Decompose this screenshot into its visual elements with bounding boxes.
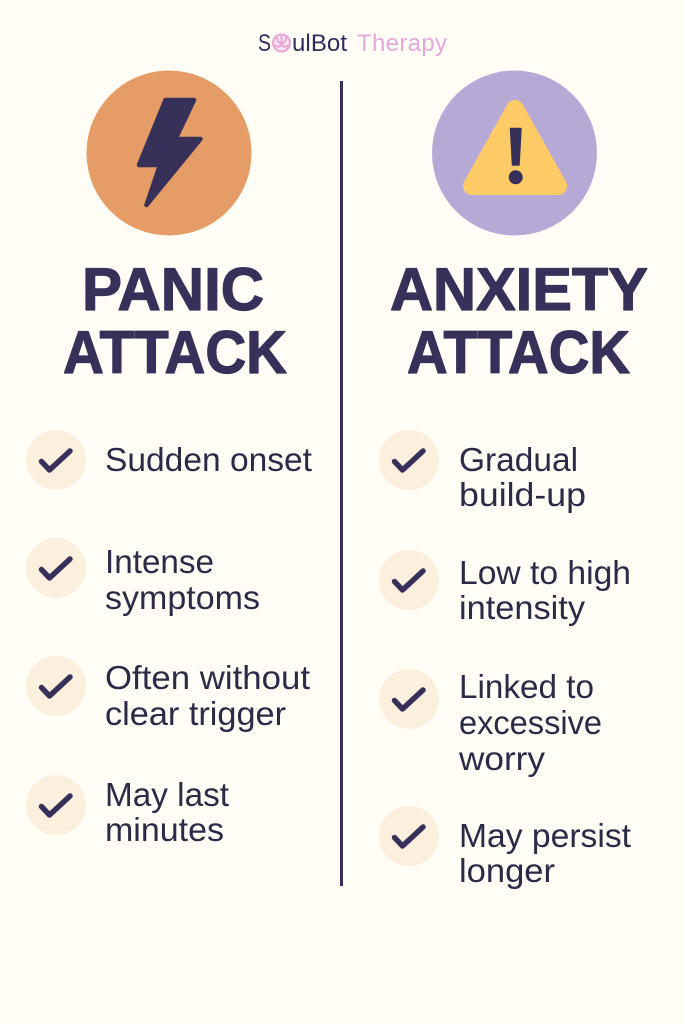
item: intense symptoms <box>26 538 260 616</box>
item: may persist longer: May persist <box>459 817 631 854</box>
panel: panic attack <box>26 70 312 848</box>
item: often without clear trigger <box>26 656 310 732</box>
item: may last minutes: May last <box>105 776 229 813</box>
heading: panic attack: PANIC <box>82 256 264 323</box>
center divider <box>340 81 343 886</box>
icon: lightning bolt <box>86 70 252 236</box>
item: linked to excessive worry: excessive <box>459 704 602 741</box>
item: often without clear trigger: Often without <box>105 659 310 696</box>
logo: SoulBot Therapy <box>258 30 447 57</box>
icon: brain <box>273 34 290 52</box>
item: may persist longer: longer <box>459 852 555 889</box>
item: intense symptoms: symptoms <box>105 579 260 616</box>
panel: anxiety attack <box>379 70 648 889</box>
icon: warning triangle <box>432 70 597 236</box>
item: may last minutes <box>26 775 229 848</box>
item: may last minutes: minutes <box>105 811 224 848</box>
item: low to high intensity <box>379 550 631 626</box>
heading: anxiety attack: ATTACK <box>407 319 630 386</box>
item: low to high intensity: Low to high <box>459 554 631 591</box>
heading: panic attack <box>63 256 287 386</box>
logo: SoulBot Therapy: ulBot <box>292 30 347 57</box>
item: gradual build-up: Gradual <box>459 441 578 478</box>
logo: SoulBot Therapy: Therapy <box>357 30 447 57</box>
heading: anxiety attack: ANXIETY <box>390 256 648 323</box>
item: linked to excessive worry <box>379 668 602 777</box>
item: may persist longer <box>379 806 631 889</box>
item: gradual build-up <box>379 430 586 513</box>
item: intense symptoms: Intense <box>105 543 214 580</box>
heading: panic attack: ATTACK <box>63 319 287 386</box>
item: often without clear trigger: clear trigger <box>105 695 286 732</box>
heading: anxiety attack <box>390 256 648 386</box>
item: gradual build-up: build-up <box>459 476 586 513</box>
item: low to high intensity: intensity <box>459 589 586 626</box>
item: linked to excessive worry: Linked to <box>459 668 594 705</box>
logo: SoulBot Therapy: S <box>258 30 271 57</box>
item: sudden onset <box>26 430 312 490</box>
item: linked to excessive worry: worry <box>458 740 546 777</box>
item: sudden onset: Sudden onset <box>105 441 312 478</box>
